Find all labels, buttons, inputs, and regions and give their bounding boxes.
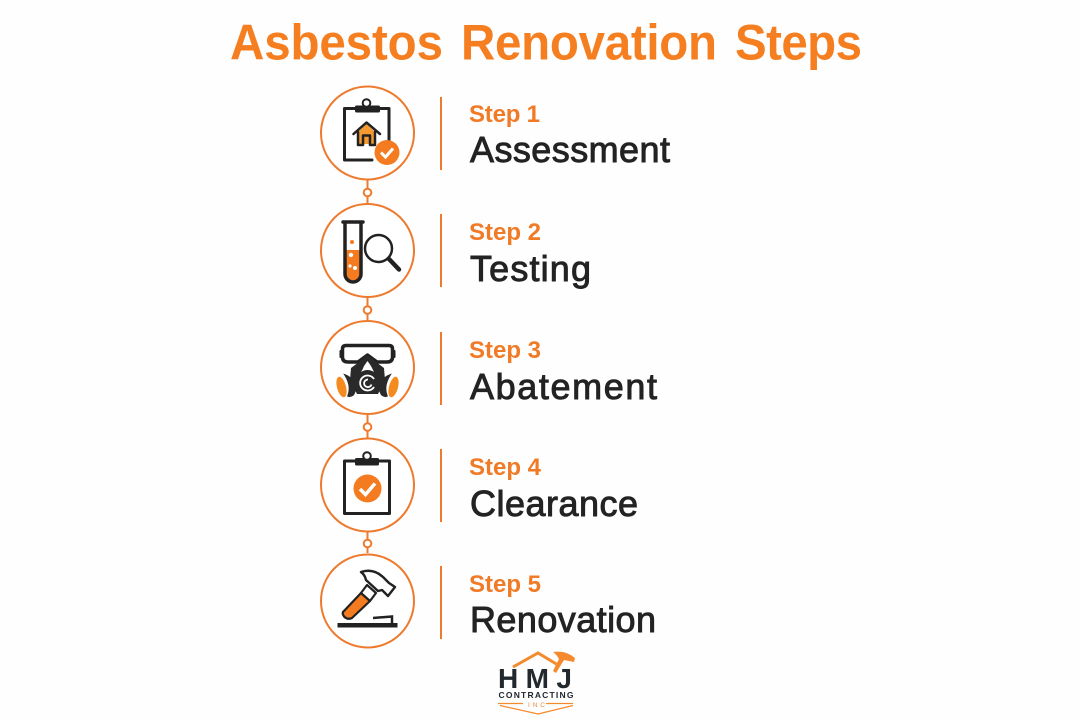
icon: clipboard with check	[321, 438, 414, 532]
title	[230, 15, 862, 71]
step name: Assessment	[470, 129, 670, 170]
logo hammer	[553, 652, 575, 673]
logo subtitle: CONTRACTING	[498, 690, 574, 700]
step name: Renovation	[470, 599, 656, 640]
icon: hammer and nail	[321, 554, 414, 648]
step 3	[321, 321, 657, 414]
step 1	[321, 86, 670, 180]
divider	[440, 449, 442, 522]
step 4	[321, 438, 638, 532]
logo base	[498, 704, 573, 714]
icon: clipboard with house and check	[321, 86, 414, 180]
step label: Step 5	[469, 571, 541, 598]
logo roof	[513, 653, 558, 667]
step label: Step 2	[469, 219, 541, 246]
logo: HMJ Contracting Inc	[498, 652, 575, 714]
divider	[440, 97, 442, 170]
connector line between step circles	[364, 180, 371, 553]
step label: Step 1	[469, 101, 540, 128]
step label: Step 4	[469, 454, 542, 481]
step 5	[321, 554, 656, 648]
title: Renovation	[461, 15, 717, 71]
divider	[440, 566, 442, 639]
icon: test tube and magnifier	[321, 204, 414, 297]
title: Steps	[735, 15, 862, 71]
divider	[440, 332, 442, 405]
logo name: HMJ	[498, 663, 572, 694]
step name: Abatement	[470, 366, 657, 407]
divider	[440, 214, 442, 287]
step 2	[321, 204, 591, 297]
step name: Testing	[470, 248, 591, 289]
logo suffix: INC	[528, 702, 545, 709]
step name: Clearance	[470, 483, 638, 524]
title: Asbestos	[230, 15, 443, 71]
icon: respirator mask	[321, 321, 414, 414]
step label: Step 3	[469, 337, 541, 364]
